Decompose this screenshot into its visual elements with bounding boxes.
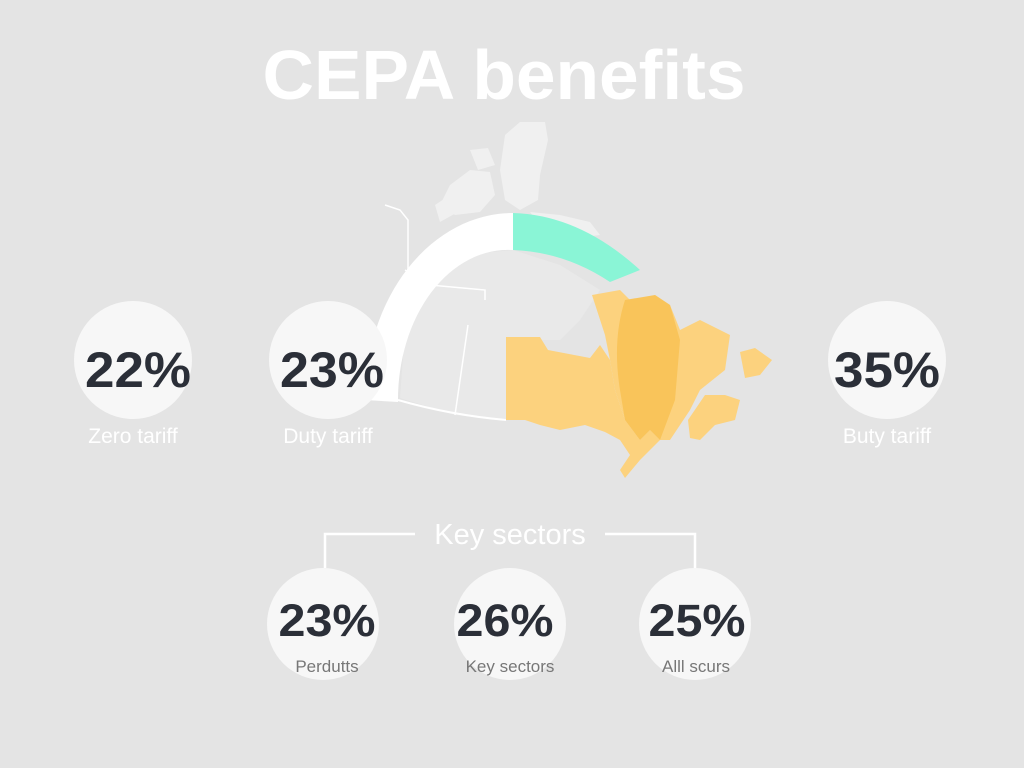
stat: 23% perdutts xyxy=(267,568,379,680)
gauge arc green xyxy=(513,213,640,282)
stat: 22% zero tariff: 22% xyxy=(85,342,191,398)
stat: 23% duty tariff xyxy=(269,301,387,448)
stat: 23% duty tariff: Duty tariff xyxy=(283,425,373,448)
stat: 22% zero tariff: Zero tariff xyxy=(88,425,178,448)
key sectors heading with bracket xyxy=(325,519,695,568)
stat: 22% zero tariff xyxy=(74,301,192,448)
stat: 25% alll scurs: 25% xyxy=(648,595,746,646)
stat: 26% key sectors: 26% xyxy=(456,595,554,646)
map of canada xyxy=(365,122,772,478)
maritimes xyxy=(688,395,740,440)
stat: 23% perdutts: Perdutts xyxy=(295,657,359,676)
quebec xyxy=(592,290,730,440)
stat: 26% key sectors xyxy=(454,568,566,680)
western interior xyxy=(400,250,600,420)
title: CEPA benefits xyxy=(262,36,746,114)
key sectors heading with bracket: Key sectors xyxy=(434,519,586,551)
stat: 23% duty tariff: 23% xyxy=(280,342,384,398)
ontario xyxy=(506,337,660,478)
gauge arc white xyxy=(365,213,513,402)
stat: 35% buty tariff: 35% xyxy=(834,342,940,398)
stat: 35% buty tariff: Buty tariff xyxy=(843,425,931,448)
stat: 35% buty tariff xyxy=(828,301,946,448)
arctic islands xyxy=(435,122,600,238)
stat: 25% alll scurs: Alll scurs xyxy=(662,657,730,676)
stat: 26% key sectors: Key sectors xyxy=(466,657,554,676)
stat: 25% alll scurs xyxy=(639,568,751,680)
stat: 23% perdutts: 23% xyxy=(278,595,376,646)
